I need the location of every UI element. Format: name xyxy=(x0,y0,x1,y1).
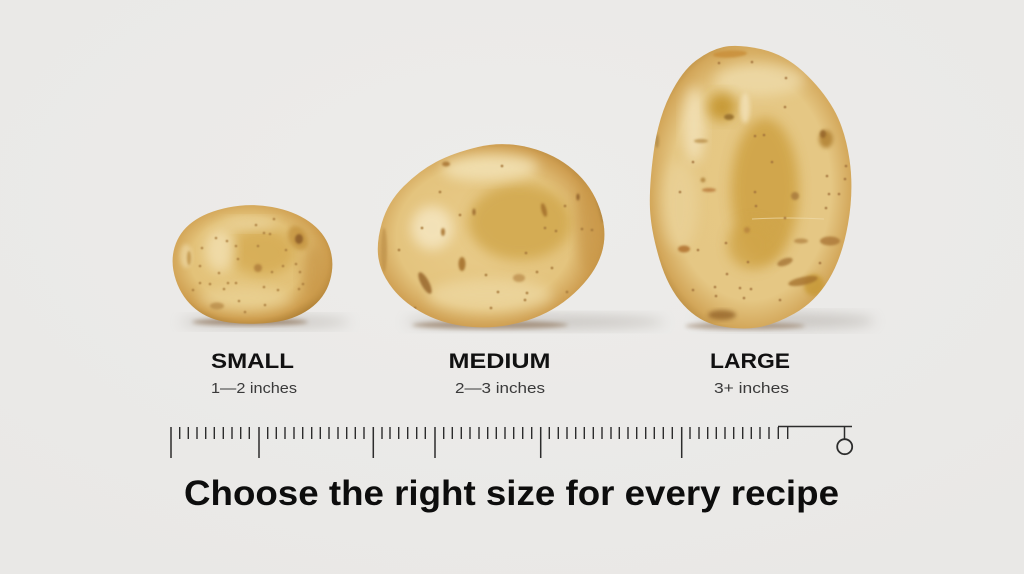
label: medium: MEDIUM xyxy=(448,349,550,373)
large potato xyxy=(650,46,875,330)
label: medium xyxy=(448,349,550,397)
label: large: LARGE xyxy=(710,349,790,373)
small potato xyxy=(173,205,350,328)
label: medium: 2—3 inches xyxy=(455,380,545,397)
label: large: 3+ inches xyxy=(714,380,789,397)
ruler xyxy=(171,426,852,458)
label: large xyxy=(710,349,790,397)
label: small: 1—2 inches xyxy=(211,380,297,397)
medium potato xyxy=(378,144,665,329)
tagline: Choose the right size for every recipe xyxy=(184,474,839,513)
label: small xyxy=(211,349,297,397)
label: small: SMALL xyxy=(211,349,294,373)
